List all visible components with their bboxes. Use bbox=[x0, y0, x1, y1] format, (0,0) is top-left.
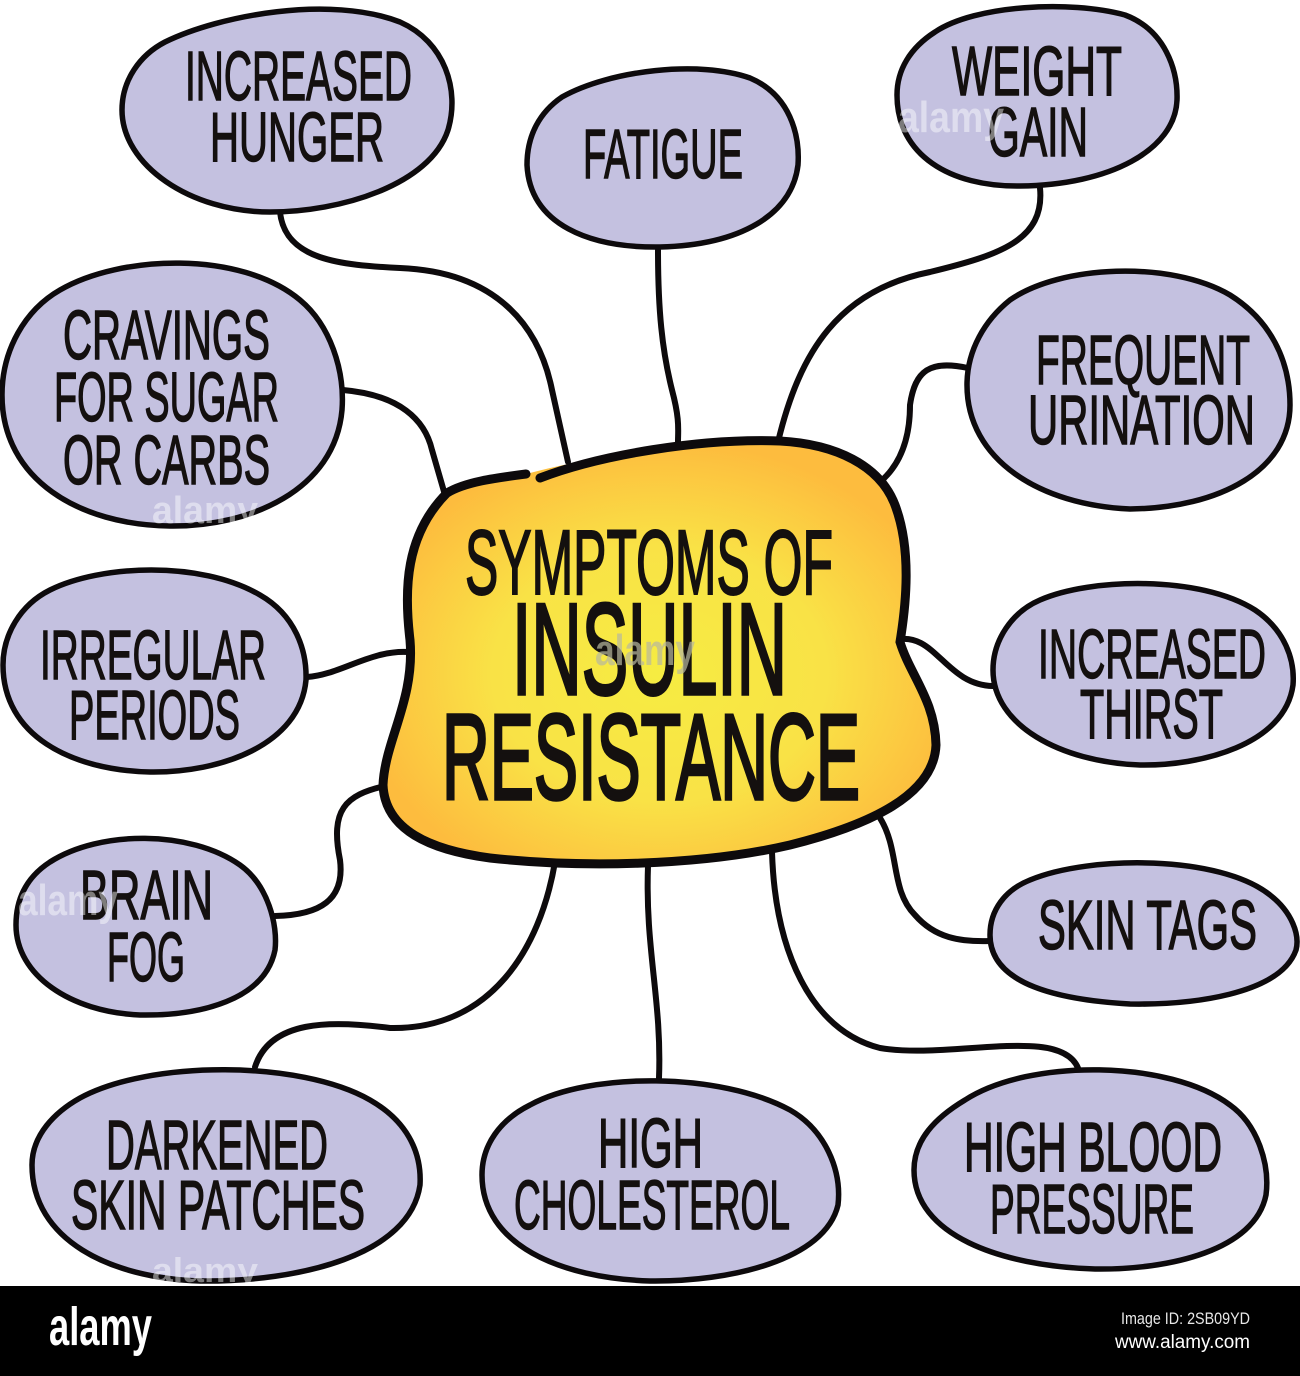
node: irregular periods bbox=[3, 570, 306, 772]
footer logo: alamy bbox=[49, 1297, 152, 1357]
node: high cholesterol bbox=[482, 1081, 839, 1281]
node: high cholesterol: HIGH bbox=[598, 1104, 703, 1182]
image id: Image ID: 2SB09YD bbox=[1121, 1309, 1250, 1328]
title: INSULIN bbox=[512, 576, 787, 722]
title bbox=[442, 512, 860, 825]
node: cravings: CRAVINGS bbox=[63, 296, 270, 374]
node: high cholesterol: CHOLESTEROL bbox=[514, 1166, 790, 1244]
node: fatigue: FATIGUE bbox=[583, 115, 743, 193]
node: weight gain bbox=[897, 7, 1177, 186]
watermarks: alamy bbox=[152, 490, 258, 532]
node: brain fog: FOG bbox=[107, 918, 185, 996]
node: irregular periods: PERIODS bbox=[69, 676, 240, 754]
node: frequent urination bbox=[967, 271, 1290, 509]
watermarks: alamy bbox=[595, 626, 695, 675]
node: increased hunger: INCREASED bbox=[185, 37, 412, 115]
node: cravings: FOR SUGAR bbox=[54, 358, 279, 436]
central blob bbox=[383, 441, 936, 864]
node: irregular periods: IRREGULAR bbox=[40, 616, 266, 694]
node: brain fog bbox=[16, 838, 276, 1015]
node: increased thirst bbox=[993, 584, 1293, 765]
node: increased hunger: HUNGER bbox=[210, 98, 384, 176]
watermarks bbox=[18, 93, 1004, 1290]
node: increased hunger bbox=[122, 9, 452, 212]
node: skin tags bbox=[990, 863, 1297, 1004]
watermarks: alamy bbox=[18, 876, 118, 925]
node: fatigue bbox=[527, 69, 798, 247]
node: weight gain: WEIGHT bbox=[952, 32, 1122, 110]
footer bar bbox=[0, 1286, 1300, 1376]
node: brain fog: BRAIN bbox=[80, 856, 213, 934]
node: weight gain: GAIN bbox=[988, 93, 1088, 171]
connectors bbox=[255, 188, 1078, 1078]
title: RESISTANCE bbox=[442, 689, 860, 825]
node: darkened skin patches: SKIN PATCHES bbox=[71, 1166, 365, 1244]
node: darkened skin patches: DARKENED bbox=[106, 1106, 328, 1184]
title: SYMPTOMS OF bbox=[465, 512, 833, 614]
node: cravings bbox=[2, 263, 342, 526]
website: www.alamy.com bbox=[1114, 1332, 1250, 1353]
node: darkened skin patches bbox=[32, 1070, 420, 1281]
node: high blood pressure bbox=[914, 1070, 1267, 1269]
watermarks: alamy bbox=[152, 1252, 258, 1290]
watermarks: alamy bbox=[898, 93, 1004, 142]
node: cravings: OR CARBS bbox=[63, 421, 270, 499]
